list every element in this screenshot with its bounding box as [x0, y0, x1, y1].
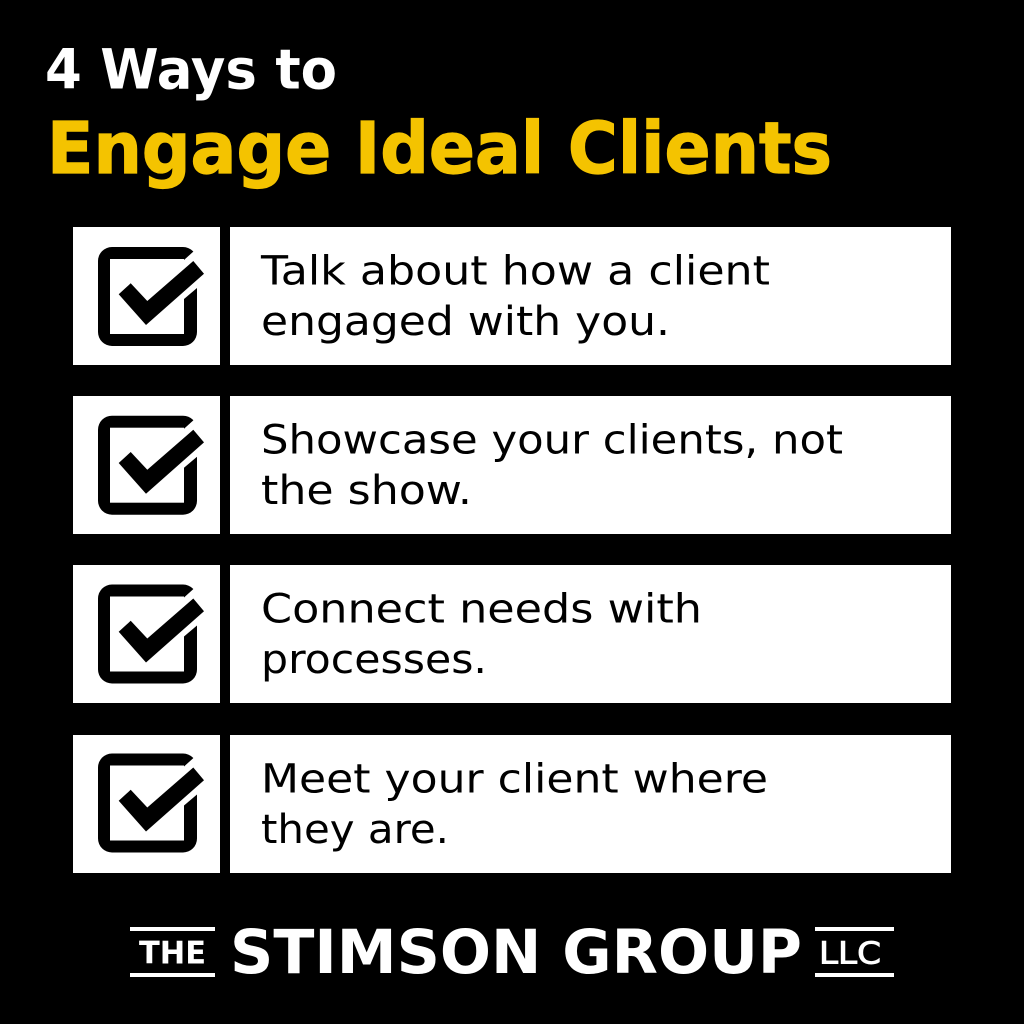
text: item 1 [260, 246, 770, 345]
footer logo: THE [139, 936, 206, 972]
text: item 1: Talk about how a client [260, 246, 770, 294]
icon: checkbox 2 [98, 416, 210, 515]
panel: item 3 [73, 565, 951, 703]
title: Engage Ideal Clients [47, 107, 832, 190]
title: 4 Ways to [45, 38, 337, 102]
icon: checkbox 4 [98, 754, 210, 852]
text: item 2 [261, 416, 843, 514]
text: item 3: Connect needs with [261, 584, 702, 632]
footer logo: STIMSON GROUP [230, 917, 802, 988]
text: item 4 [261, 754, 768, 853]
footer logo: LLC [819, 936, 881, 972]
panel: item 4 [73, 735, 951, 873]
text: item 1: engaged with you. [261, 297, 670, 345]
panel: item 1 [73, 227, 951, 365]
title [45, 38, 832, 190]
text: item 2: Showcase your clients, not [261, 416, 843, 464]
icon: checkbox 3 [98, 584, 210, 684]
panel: item 2 [73, 396, 951, 534]
text: item 2: the show. [261, 466, 472, 514]
text: item 3 [261, 584, 702, 683]
text: item 4: they are. [261, 805, 449, 853]
icon: checkbox 1 [98, 247, 210, 346]
text: item 4: Meet your client where [261, 754, 768, 802]
text: item 3: processes. [261, 635, 487, 683]
